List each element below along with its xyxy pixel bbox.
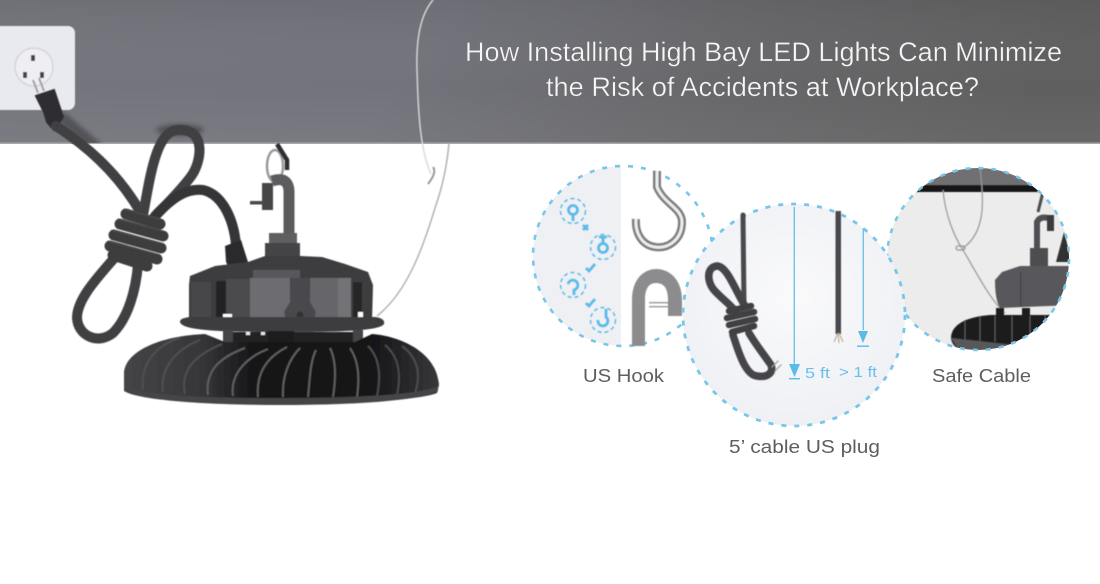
cable length 5 ft: 5 ft xyxy=(805,365,831,382)
wall socket xyxy=(0,26,75,110)
banner background xyxy=(0,0,1100,145)
heatsink xyxy=(950,314,1050,348)
housing panels xyxy=(191,270,362,322)
safety wire xyxy=(377,0,449,316)
heatsink base ring xyxy=(124,386,438,405)
wire length 1 ft: > 1 ft xyxy=(839,364,878,381)
wire length 1 ft xyxy=(839,228,878,381)
title: the Risk of Accidents at Workplace? xyxy=(546,72,979,102)
label: safe cable: Safe Cable xyxy=(932,366,1031,386)
panel: 5 ft cable circle xyxy=(683,204,905,457)
power cable with knot xyxy=(36,90,236,338)
panel: US hook circle xyxy=(533,165,713,386)
cable gland xyxy=(225,240,248,274)
infographic canvas xyxy=(0,0,1100,457)
high bay lamp xyxy=(124,144,439,405)
stripped wire xyxy=(834,211,843,343)
ceiling xyxy=(924,168,1029,186)
icon: grey hook profile xyxy=(632,269,682,346)
icons: hook orientation steps xyxy=(560,198,616,332)
flange xyxy=(180,317,384,332)
housing xyxy=(189,256,373,322)
icon: coiled cable xyxy=(709,215,781,376)
panel: safe cable circle xyxy=(886,166,1070,382)
label: 5' cable US plug: 5’ cable US plug xyxy=(729,437,880,457)
heatsink xyxy=(124,334,439,404)
title: How Installing High Bay LED Lights Can Minimize xyxy=(465,37,1062,67)
hanging hook and ring xyxy=(250,144,289,238)
icon: steel hook xyxy=(636,171,682,247)
knot coils xyxy=(110,214,163,266)
lamp body xyxy=(995,266,1072,308)
hook xyxy=(1038,192,1043,212)
standoffs xyxy=(232,332,268,348)
fins xyxy=(143,338,418,397)
title xyxy=(465,37,1062,102)
stem base xyxy=(269,233,297,245)
label: US hook: US Hook xyxy=(583,366,665,386)
cable length 5 ft xyxy=(789,207,831,382)
plug xyxy=(36,90,63,130)
safety wire detail xyxy=(943,168,1005,313)
